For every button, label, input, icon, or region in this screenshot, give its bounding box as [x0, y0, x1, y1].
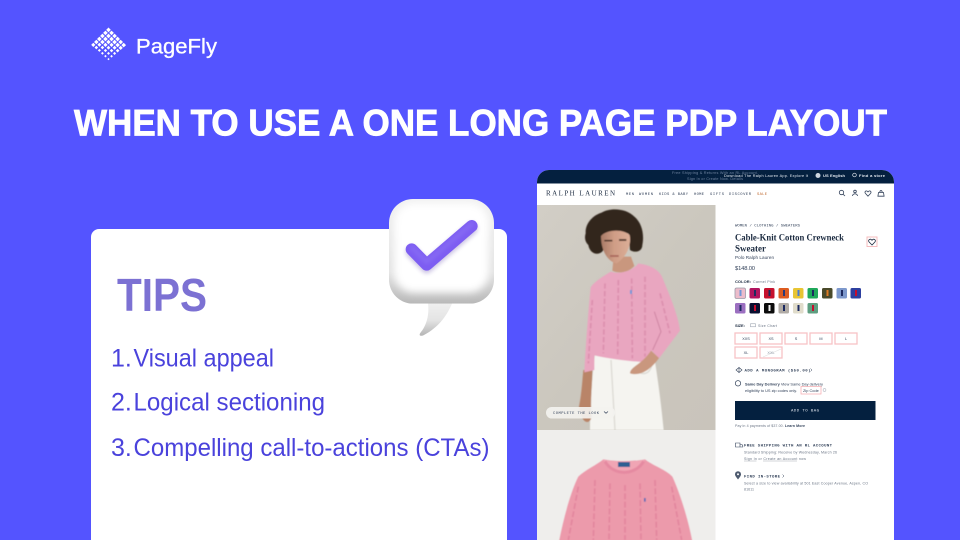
add a monogram: [736, 368, 812, 373]
nav links: MEN: [626, 193, 634, 197]
panel: tips card: [91, 229, 507, 540]
product name: Sweater: [735, 244, 767, 254]
free shipping block: Standard Shipping: Receive by Wednesday, March 26: [744, 450, 837, 454]
size buttons: XXL: [767, 351, 775, 355]
tip 3: 3.: [111, 434, 132, 462]
tip list: [111, 345, 490, 462]
size buttons: L: [845, 337, 847, 341]
free shipping block: [736, 443, 837, 461]
icon: speech bubble with check mark: [389, 199, 494, 336]
add to bag button: [735, 401, 876, 420]
product details column: [735, 224, 877, 492]
title: WHEN TO USE A ONE LONG PAGE PDP LAYOUT: [74, 103, 887, 144]
nav links: SALE: [757, 193, 768, 197]
bubble body: [389, 199, 494, 304]
same day delivery note: [735, 381, 826, 394]
logo wordmark: PageFly: [136, 36, 218, 58]
bubble tail: [420, 297, 454, 336]
polo logo: [630, 290, 632, 294]
same day delivery note: Same Day Delivery View Same Day delivery: [745, 382, 823, 386]
product photo: model: [537, 205, 716, 430]
nav links: WOMEN: [639, 193, 653, 197]
forearm on hip: [630, 351, 659, 374]
announcement bar: Sign In or Create Now. Details: [687, 177, 743, 181]
size buttons: [735, 333, 857, 358]
product photo: sweater flat lay: [537, 430, 716, 540]
size label: Size Chart: [758, 324, 777, 328]
nav links: DISCOVER: [729, 193, 752, 197]
page background: [537, 170, 894, 540]
size buttons: M: [819, 337, 823, 341]
nav links: HOME: [694, 193, 705, 197]
add a monogram: ADD A MONOGRAM ($50.00): [744, 368, 810, 373]
button: complete the look: [546, 407, 615, 418]
free shipping block: Sign In or Create an Account now: [744, 457, 806, 461]
announcement bar: [537, 170, 894, 184]
heading: tips: TIPS: [117, 269, 207, 321]
tip 1: Visual appeal: [134, 345, 274, 373]
button: complete the look: COMPLETE THE LOOK: [553, 412, 600, 416]
size label: [735, 324, 777, 328]
product name: [735, 234, 844, 252]
same day delivery note: eligibility to US zip codes only.: [745, 388, 797, 393]
brand wordmark: RALPH LAUREN: [546, 190, 615, 198]
find in-store block: Select a size to view availability at 501 East Cooper Avenue, Aspen, CO: [744, 482, 868, 486]
size buttons: XL: [744, 351, 748, 355]
find in-store block: FIND IN-STORE: [744, 476, 781, 480]
panel: product page screenshot: [537, 170, 894, 540]
tip 1: 1.: [111, 345, 132, 373]
tip 2: 2.: [111, 389, 132, 417]
color label: Carmel Pink: [753, 280, 775, 284]
icon: diamond dot grid: [91, 28, 126, 62]
hair: [585, 209, 643, 254]
brand line: Polo Ralph Lauren: [735, 255, 774, 260]
announcement bar: Free Shipping & Returns With an RL Account.: [672, 171, 758, 175]
trousers: [590, 354, 664, 430]
sweater body: [559, 459, 692, 540]
payment note: Pay in 4 payments of $37.00. Learn More: [735, 424, 805, 428]
announcement bar: Find a store: [859, 173, 886, 178]
color label: COLOR:: [735, 279, 751, 284]
size buttons: XXS: [742, 337, 750, 341]
face: [601, 231, 630, 263]
colour swatches: [735, 288, 861, 314]
neck: [612, 257, 634, 272]
zip code highlight: Zip Code: [803, 388, 819, 393]
size buttons: S: [795, 337, 798, 341]
size buttons: XS: [768, 337, 774, 341]
free shipping block: FREE SHIPPING WITH AN RL ACCOUNT: [744, 444, 833, 448]
card background: [91, 229, 507, 540]
icon: wishlist heart: [867, 237, 877, 246]
navigation bar: [546, 190, 884, 198]
logo: PageFly: [91, 28, 218, 62]
nav icons: [839, 190, 884, 196]
nav links: KIDS & BABY: [659, 193, 689, 197]
neck label: [618, 462, 630, 467]
announcement bar: Download The Ralph Lauren App. Explore It: [724, 174, 809, 178]
add to bag button: ADD TO BAG: [791, 409, 820, 413]
find in-store block: [735, 471, 868, 492]
sweater: [584, 263, 680, 372]
nav links: GIFTS: [710, 193, 725, 197]
logo: [644, 498, 646, 502]
announcement bar: US English: [823, 173, 846, 178]
nav links: [626, 192, 767, 195]
model left arm and hand: [579, 370, 592, 422]
product name: Cable-Knit Cotton Crewneck: [735, 234, 845, 244]
breadcrumb: WOMEN / CLOTHING / SWEATERS: [735, 224, 801, 228]
size label: SIZE:: [735, 323, 745, 328]
find in-store block: 81611: [744, 488, 754, 492]
price: $148.00: [735, 266, 755, 272]
check mark: [412, 224, 472, 267]
tip 2: Logical sectioning: [134, 389, 325, 417]
color label: [735, 280, 775, 283]
tip 3: Compelling call-to-actions (CTAs): [134, 434, 490, 462]
